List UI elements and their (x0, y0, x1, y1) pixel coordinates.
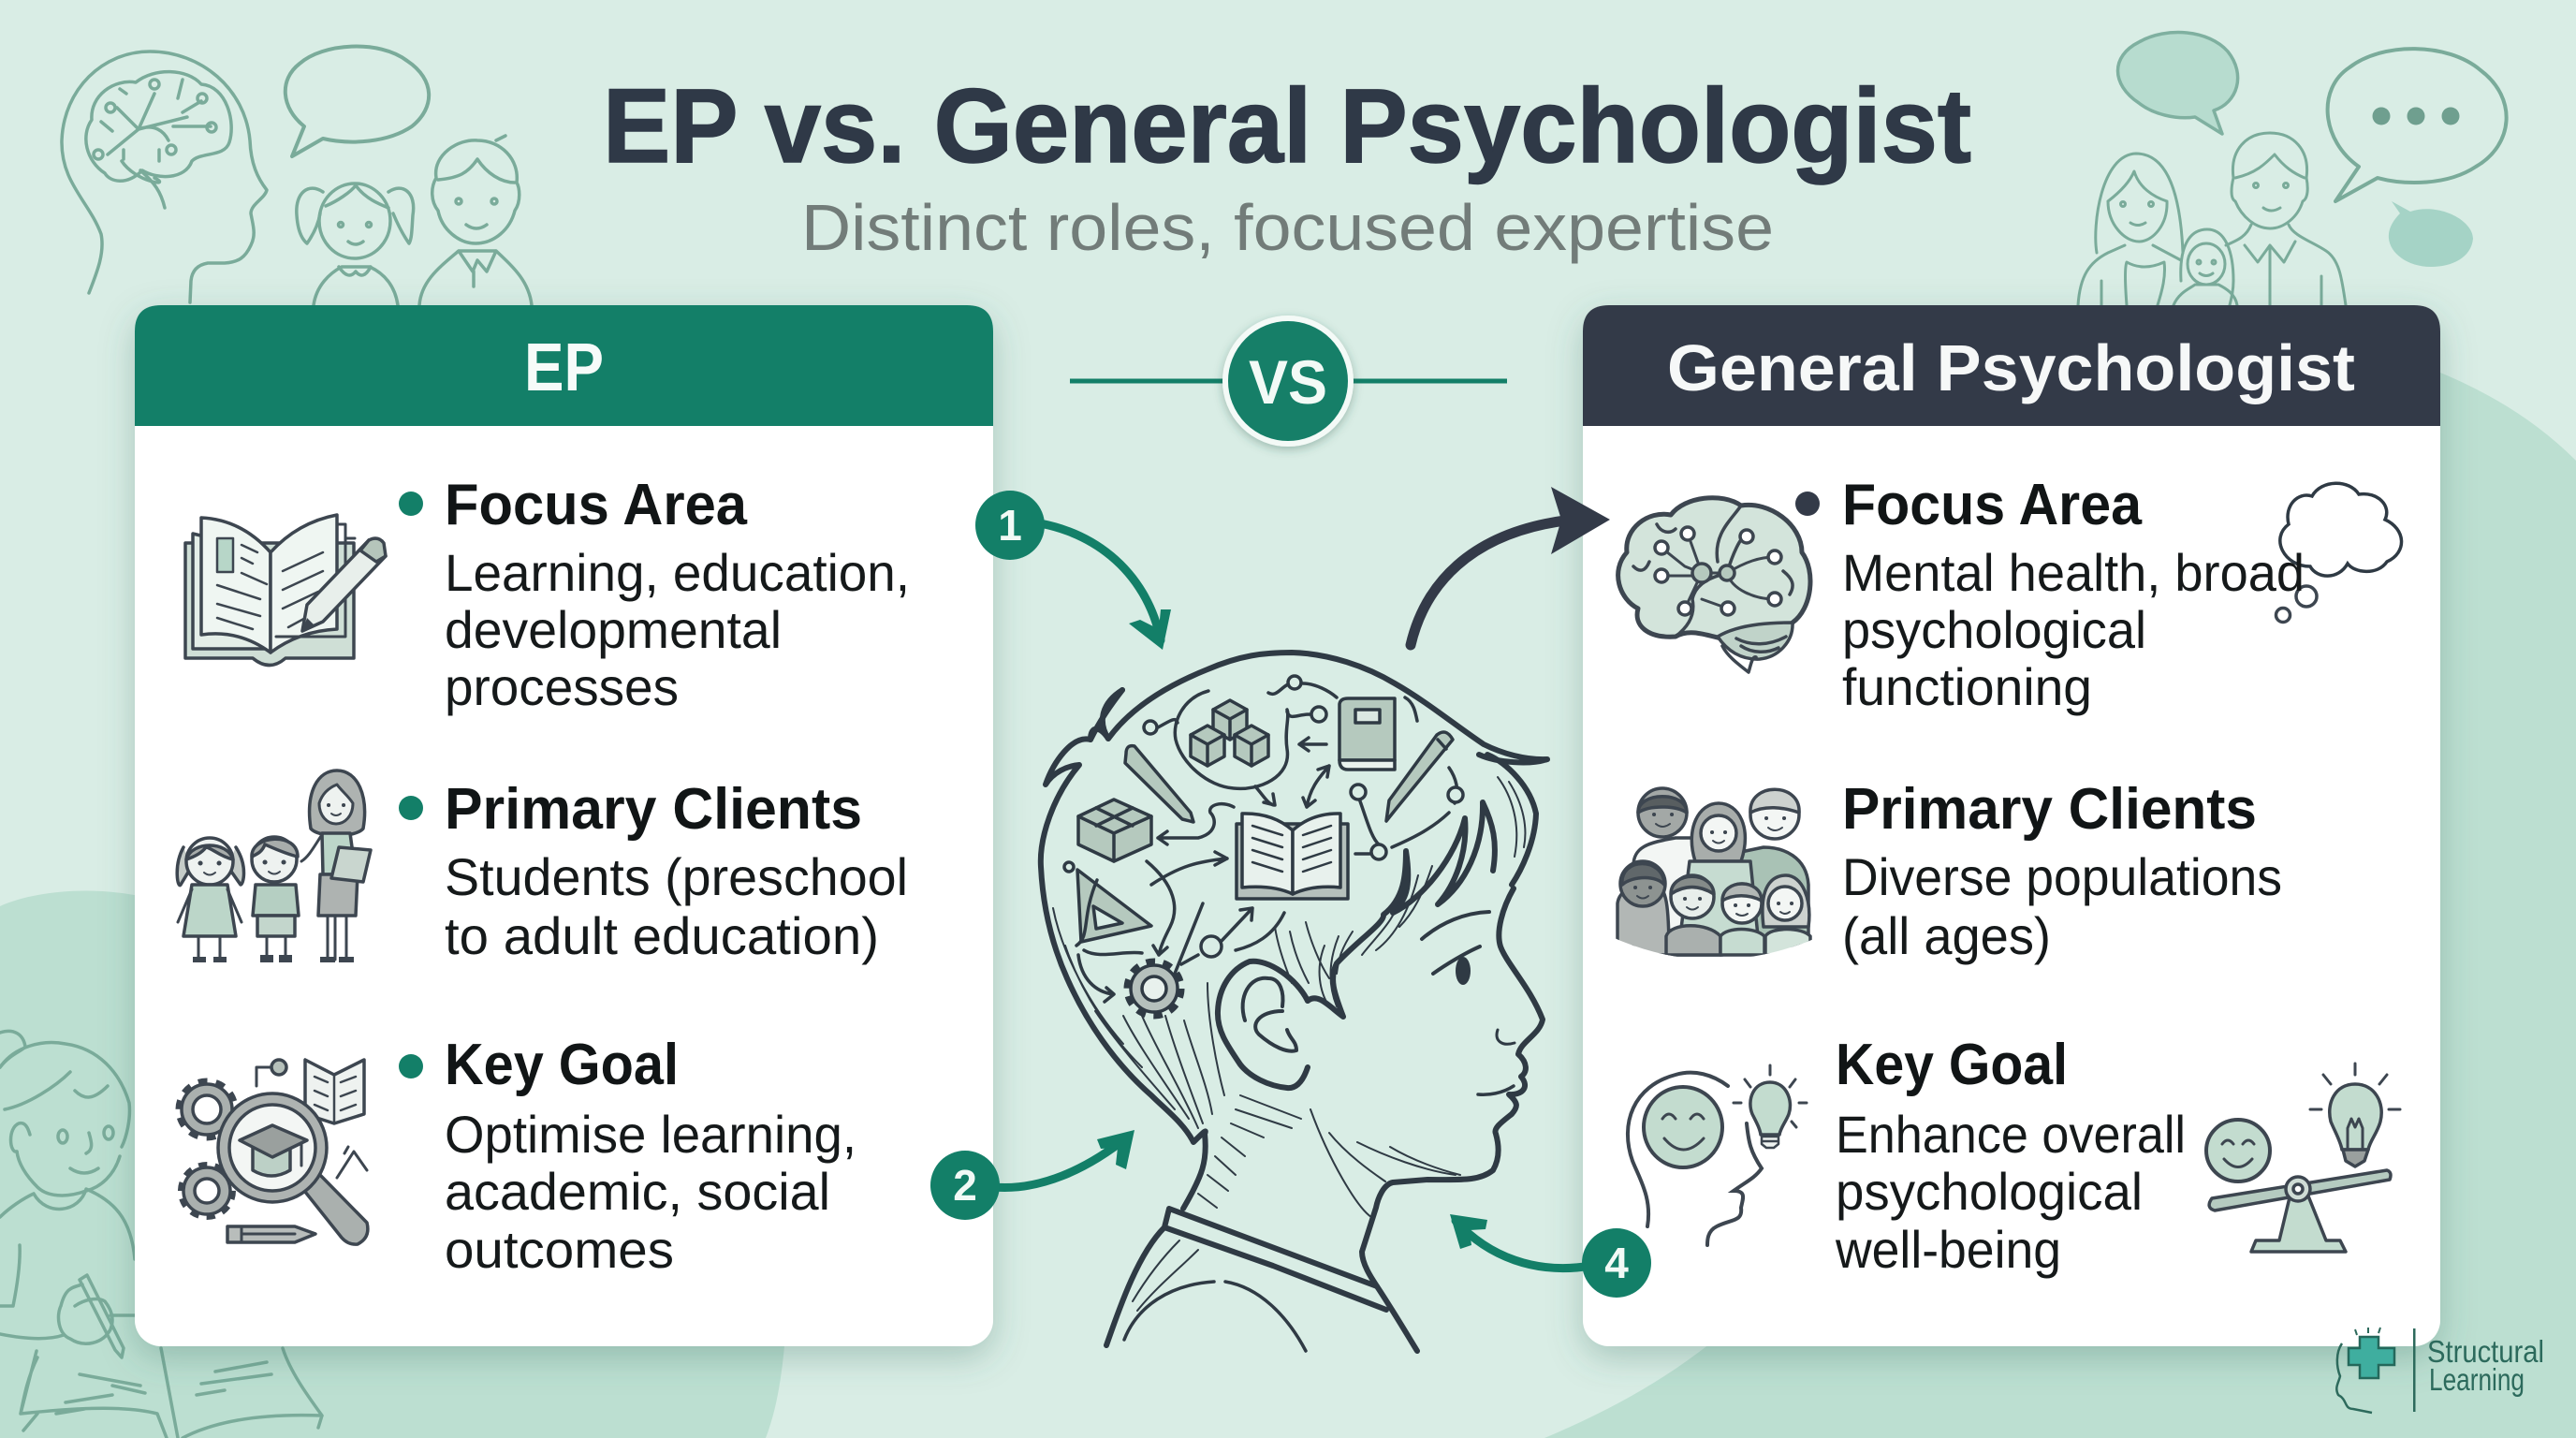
Key Goal text (445, 1033, 856, 1279)
icon: magnifier, gears and graduation cap (181, 1060, 368, 1244)
decoration: child writing in book (0, 1031, 322, 1438)
Focus Area text: processes (445, 657, 679, 716)
Focus Area text: psychological (1842, 600, 2146, 659)
Focus Area text (1842, 473, 2305, 716)
Primary Clients text: to adult education) (445, 906, 879, 965)
Primary Clients text: Primary Clients (445, 777, 862, 842)
decoration: head with brain outline (62, 51, 267, 302)
background blob: lower right (1544, 373, 2576, 1438)
central illustration: child's head profile (1030, 0, 1547, 1351)
Key Goal text: psychological (1836, 1162, 2143, 1221)
Focus Area text: Focus Area (445, 473, 747, 537)
icon: set square (1077, 870, 1151, 942)
icon: open book and pencil (185, 515, 386, 665)
Focus Area text: Focus Area (1842, 473, 2142, 537)
icon: smiling head with light bulb (1628, 1065, 1807, 1245)
Key Goal text: academic, social (445, 1162, 830, 1221)
Key Goal text: Key Goal (445, 1033, 679, 1097)
Primary Clients text (445, 777, 908, 965)
icon: gear (1129, 963, 1179, 1014)
bullet (399, 492, 423, 516)
icon: closed book (1339, 698, 1395, 770)
connector nodes (1064, 676, 1463, 957)
arrow 2: 2 (953, 1161, 977, 1210)
arrow 1 (975, 491, 1171, 650)
decoration: large speech bubble with dots (2328, 49, 2507, 201)
General Psychologist header (1583, 305, 2440, 426)
connector arrows and nodes inside head (1076, 683, 1457, 1002)
badge 4 (1582, 1228, 1651, 1298)
badge 2 (930, 1151, 1000, 1220)
background blob: lower left (0, 891, 785, 1438)
Key Goal text: well-being (1835, 1220, 2061, 1279)
icon: pencil right (1386, 732, 1453, 821)
connector line right of VS (1353, 378, 1507, 384)
panel: EP card (135, 305, 993, 1346)
icon: pencil left (1125, 746, 1193, 822)
logo: Structural Learning (2336, 1328, 2544, 1413)
Key Goal text: Enhance overall (1836, 1105, 2186, 1164)
Focus Area text (445, 473, 910, 716)
Focus Area text: functioning (1842, 657, 2092, 716)
Focus Area text: Learning, education, (445, 543, 910, 602)
EP card header (135, 305, 993, 426)
decoration: boy (419, 136, 532, 305)
Primary Clients text: Students (preschool (445, 847, 908, 906)
Primary Clients text: Diverse populations (1842, 847, 2282, 906)
decoration: small filled speech bubble (2389, 201, 2473, 267)
icon: brain with circuit nodes (1618, 498, 1810, 672)
panel: General Psychologist card (1583, 305, 2440, 1346)
icon: open book (1237, 814, 1348, 899)
bullet (399, 1054, 423, 1078)
VS badge: VS (1249, 347, 1327, 417)
icon: cubes in circle (1175, 691, 1288, 788)
arrow 4 (1450, 1214, 1651, 1298)
arrow 3: dark arrow to General Psychologist (1411, 487, 1610, 645)
General Psychologist heading: General Psychologist (1667, 331, 2355, 404)
icon: diverse group of people (1617, 788, 1810, 955)
title: EP vs. General Psychologist (603, 67, 1971, 184)
Key Goal text: Key Goal (1836, 1033, 2068, 1097)
hair and neck hatching (1030, 0, 1525, 1311)
Key Goal text (1835, 1033, 2186, 1279)
Focus Area text: developmental (445, 600, 782, 659)
connector line left of VS (1070, 378, 1224, 384)
EP heading: EP (524, 330, 604, 405)
logo: Structural Learning: Structural (2427, 1334, 2544, 1369)
bullet (399, 796, 423, 820)
bullet (1795, 492, 1820, 516)
Focus Area text: Mental health, broad (1842, 543, 2305, 602)
Primary Clients text (1842, 777, 2282, 965)
arrow 2 (930, 1130, 1134, 1220)
logo: Structural Learning: Learning (2429, 1362, 2525, 1397)
subtitle: Distinct roles, focused expertise (801, 191, 1774, 264)
decoration: family (2078, 133, 2346, 305)
Key Goal text: outcomes (445, 1220, 674, 1279)
arrow 4: 4 (1604, 1239, 1629, 1287)
icon: thought cloud (2276, 483, 2402, 622)
decoration: speech bubble (285, 47, 429, 156)
Key Goal text: Optimise learning, (445, 1105, 856, 1164)
arrow 1: 1 (998, 501, 1022, 550)
badge 1 (975, 491, 1045, 560)
decoration: filled speech bubble (2117, 33, 2238, 134)
decoration: girl (297, 183, 414, 305)
Primary Clients text: Primary Clients (1842, 777, 2257, 842)
VS badge (1225, 318, 1351, 444)
icon: children with teacher (177, 770, 371, 962)
head and body outline (1041, 653, 1547, 1351)
icon: balance with smiley and bulb (2206, 1064, 2400, 1252)
Primary Clients text: (all ages) (1842, 906, 2051, 965)
icon: cube left (1078, 800, 1151, 861)
